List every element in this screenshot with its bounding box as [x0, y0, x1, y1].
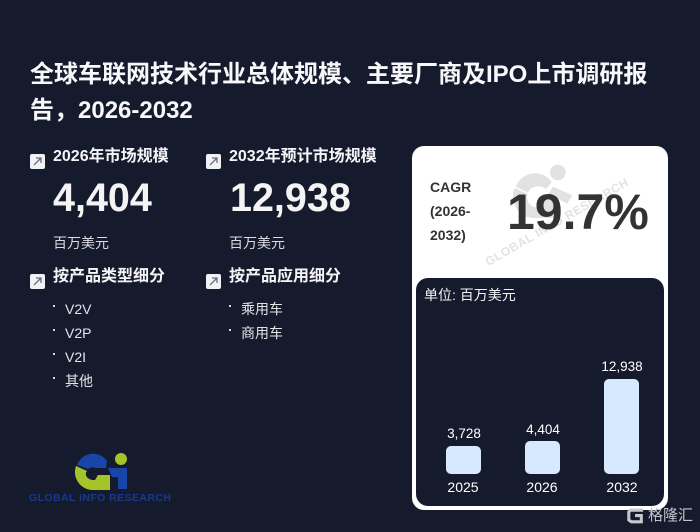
- value 2026: 4,404: [526, 422, 560, 437]
- panel: segmentation by product type: [30, 267, 165, 389]
- CAGR label: 2032): [430, 227, 466, 243]
- list: product types: 其他: [65, 373, 93, 389]
- CAGR value: 19.7%: [507, 184, 649, 240]
- panel: 2026 market size: [30, 147, 169, 251]
- panel: bar chart: [416, 278, 664, 506]
- heading: 2032 forecast market size: 2032年预计市场规模: [229, 148, 377, 165]
- heading: product type: 按产品类型细分: [53, 268, 165, 285]
- value: 4,404: 4,404: [53, 176, 152, 220]
- bar 2025: [446, 426, 481, 495]
- unit: 2032: 百万美元: [229, 235, 285, 251]
- CAGR label: (2026-: [430, 203, 470, 219]
- icon: G mark: [627, 508, 644, 524]
- watermark: grey Gi mark: [513, 164, 572, 218]
- year 2026: 2026: [526, 479, 558, 495]
- value 2025: 3,728: [447, 426, 481, 441]
- brand text: 格隆汇: [648, 507, 693, 524]
- icon: arrow product type: [30, 274, 45, 289]
- list: applications: 乘用车: [241, 301, 283, 317]
- icon: arrow application: [206, 274, 221, 289]
- bar 2032: [601, 359, 643, 495]
- icon: arrow 2032: [206, 154, 221, 169]
- year 2025: 2025: [447, 479, 479, 495]
- value: 12,938: 12,938: [230, 176, 351, 220]
- panel: segmentation by product application: [206, 267, 341, 341]
- logo: Global Info Research: [29, 453, 171, 504]
- panel: 2032 forecast market size: [206, 147, 377, 251]
- panel: CAGR card: [412, 146, 668, 510]
- list: product types: V2I: [65, 349, 86, 365]
- CAGR label: CAGR: [430, 179, 471, 195]
- watermark: Gelonghui: [627, 507, 693, 524]
- list: product types: [53, 301, 93, 389]
- heading: application: 按产品应用细分: [229, 268, 341, 285]
- value 2032: 12,938: [601, 359, 643, 374]
- list: product types: V2V: [65, 301, 91, 317]
- unit: 2026: 百万美元: [53, 235, 109, 251]
- list: applications: 商用车: [241, 325, 283, 341]
- list: applications: [229, 301, 283, 341]
- icon: arrow 2026: [30, 154, 45, 169]
- bar 2026: [525, 422, 560, 495]
- list: product types: V2P: [65, 325, 91, 341]
- logo text: GLOBAL INFO RESEARCH: [29, 492, 171, 504]
- heading: 2026 market size: 2026年市场规模: [53, 148, 169, 165]
- icon: Gi mark: [74, 453, 127, 490]
- year 2032: 2032: [606, 479, 638, 495]
- title: 全球车联网技术行业总体规模、主要厂商及IPO上市调研报告，2026-2032: [30, 61, 647, 124]
- watermark text: GLOBAL INFO RESEARCH: [483, 175, 631, 269]
- CAGR label: [430, 179, 471, 243]
- chart unit: 单位: 百万美元: [424, 287, 516, 303]
